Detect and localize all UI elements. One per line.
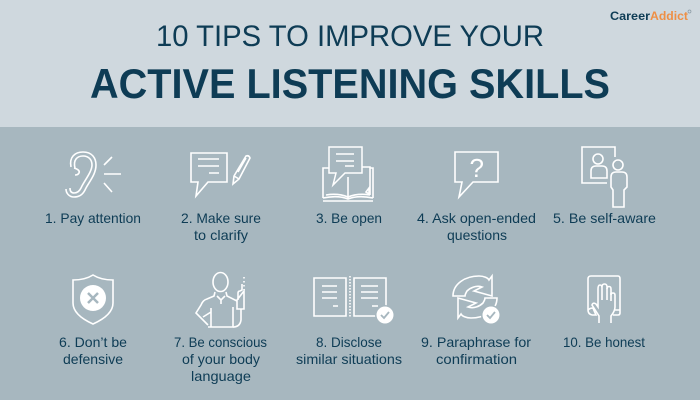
- logo: CareerAddict: Addict: [650, 9, 688, 23]
- label 1: 1. Pay attention: [45, 210, 141, 226]
- logo: CareerAddict: Career: [610, 9, 650, 23]
- tip 7: be conscious of your body language: of your body: [182, 351, 260, 367]
- label 2: 2. Make sure: [181, 210, 261, 226]
- icon: person gesturing: [196, 272, 244, 327]
- icon: speech bubble and pencil: [191, 153, 250, 196]
- label 4: 4. Ask open-ended: [417, 210, 536, 226]
- tip 6: don't be defensive: defensive: [63, 351, 123, 367]
- label 9: 9. Paraphrase for: [421, 334, 531, 350]
- tip 5: be self-aware: [553, 147, 656, 226]
- panel: tips background: [0, 127, 700, 400]
- label 10: 10. Be honest: [563, 334, 645, 350]
- label 6: 6. Don’t be: [59, 334, 127, 350]
- tip 1: pay attention: [45, 152, 141, 226]
- label 8: 8. Disclose: [316, 334, 382, 350]
- tip 4: ask open-ended questions: questions: [447, 227, 507, 243]
- tip 8: disclose similar situations: similar situations: [296, 351, 402, 367]
- title line 2: ACTIVE LISTENING SKILLS: [90, 60, 610, 107]
- tip 6: don't be defensive: [59, 275, 127, 367]
- tip 9: paraphrase for confirmation: [421, 276, 531, 367]
- title line 1: 10 TIPS TO IMPROVE YOUR: [156, 20, 544, 53]
- icon: shield with cross: [73, 275, 113, 324]
- icon: ear: [66, 152, 121, 197]
- label 3: 3. Be open: [316, 210, 382, 226]
- label 5: 5. Be self-aware: [553, 210, 656, 226]
- panel: header background: [0, 0, 700, 127]
- tip 8: disclose similar situations: [296, 276, 402, 367]
- label 7: 7. Be conscious: [174, 334, 267, 350]
- tip 7: be conscious of your body language: [174, 272, 267, 384]
- icon: person and mirror: [582, 147, 627, 207]
- tip 7: be conscious of your body language: language: [191, 368, 251, 384]
- tip 3: be open: [316, 147, 382, 226]
- icon: question speech bubble: ?: [470, 153, 484, 183]
- tip 2: make sure to clarify: to clarify: [194, 227, 248, 243]
- icon: open notebook with check: [314, 276, 395, 325]
- icon: hand on book: [588, 276, 620, 323]
- icon: book with speech bubble: [323, 147, 373, 201]
- tip 4: ask open-ended questions: [417, 152, 536, 243]
- logo: CareerAddict: [610, 9, 691, 23]
- icon: circular arrows with check: [453, 276, 501, 325]
- tip 10: be honest: [563, 276, 645, 350]
- tip 9: paraphrase for confirmation: confirmation: [436, 351, 517, 367]
- tip 2: make sure to clarify: [181, 153, 261, 243]
